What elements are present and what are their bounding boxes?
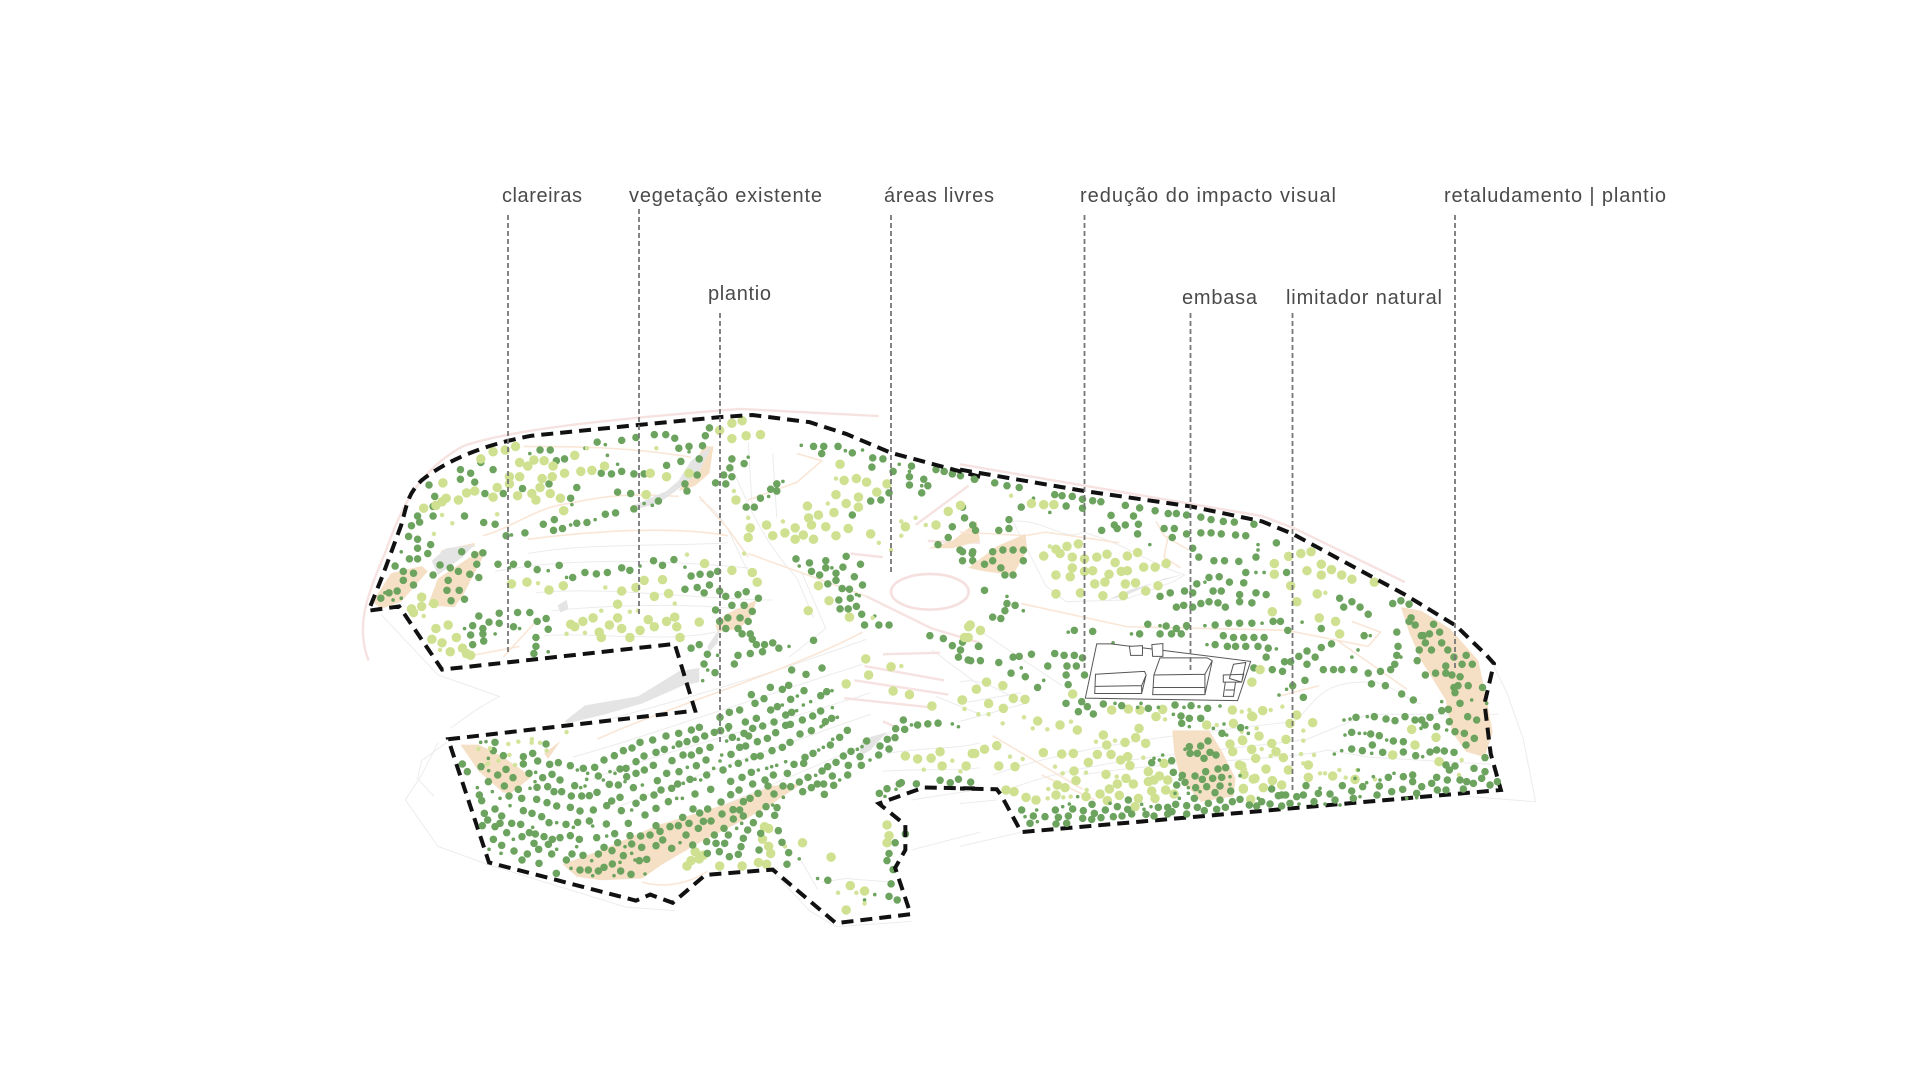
trees: small light dots, right: [978, 496, 1325, 714]
small dark dots, centre: [673, 670, 896, 843]
light large dots, lower right: [1242, 711, 1439, 799]
trees: lower right rows: [1242, 693, 1497, 807]
light small dots, lower right: [1242, 707, 1462, 779]
large dark dots, lower left: [462, 742, 650, 874]
large dark dots, centre: [653, 664, 905, 857]
trees: light green planted, right: [962, 504, 1374, 766]
dark large dots, lower meadow: [1022, 702, 1257, 824]
areas: peach regrading patches, left: [373, 446, 980, 880]
labels: callout text: plantio: [708, 283, 771, 305]
labels: callout text: redução do impacto visual: [1080, 185, 1336, 207]
trees: light green planted, left: [411, 421, 975, 910]
labels: callout text: áreas livres: [884, 185, 994, 207]
trees: small dark dots, right: [1007, 498, 1401, 689]
trees: dark green existing, right: [960, 479, 1483, 687]
boundary: dashed site limit, left: [369, 415, 980, 923]
light small dots, lower meadow: [1003, 717, 1242, 798]
building: embasa facility plan: [1085, 644, 1251, 701]
base lines: contours and paths, left: [363, 409, 980, 927]
trees: small light dots, left: [424, 448, 965, 904]
areas: peach regrading patches, right: [968, 534, 1493, 802]
leader lines: dashed callout verticals: [508, 209, 1455, 793]
light dots, lower left: [478, 742, 547, 765]
trees: plantation block, centre: [653, 664, 905, 857]
areas: gray existing clearings, left: [432, 446, 887, 757]
labels: callout text: limitador natural: [1286, 287, 1442, 309]
small dark dots, lower left: [477, 742, 645, 876]
trees: small dark dots, left: [385, 445, 958, 900]
trees: plantation block, lower left: [462, 742, 650, 876]
trees: lower meadow and peach patch: [1003, 694, 1257, 824]
dark small dots, lower meadow: [1025, 703, 1248, 822]
map: left half of the site: [363, 409, 980, 927]
labels: callout text: retaludamento | plantio: [1444, 185, 1666, 207]
labels: callout text: [502, 185, 1666, 309]
area: gray clearing, right: [1107, 574, 1185, 600]
dark large dots, lower right: [1249, 693, 1497, 806]
trees: dark green existing, left: [381, 428, 979, 900]
labels: callout text: embasa: [1182, 287, 1258, 309]
map: right half of the site: [960, 464, 1536, 846]
labels: callout text: vegetação existente: [629, 185, 822, 207]
labels: callout text: clareiras: [502, 185, 582, 207]
light large dots, lower meadow: [1003, 694, 1255, 807]
base lines: contours and paths, right: [960, 464, 1536, 846]
boundary: dashed site limit, right: [960, 470, 1501, 832]
dark small dots, lower right: [1256, 695, 1487, 807]
